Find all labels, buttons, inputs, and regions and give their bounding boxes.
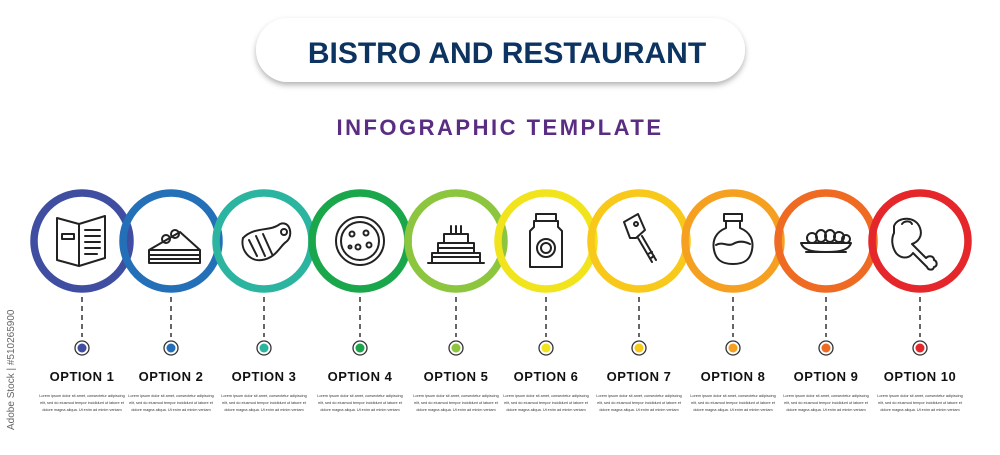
option labels: OPTION 3 bbox=[232, 369, 296, 384]
icon: chicken leg bbox=[892, 219, 937, 270]
option labels: OPTION 7 bbox=[607, 369, 671, 384]
option descriptions: dolore magna aliqua. Ut enim ad minim veniam bbox=[786, 408, 866, 412]
icon: dish bbox=[801, 230, 851, 252]
circle 10 bbox=[872, 193, 968, 289]
option descriptions: dolore magna aliqua. Ut enim ad minim veniam bbox=[506, 408, 586, 412]
option descriptions: elit, sed do eiusmod tempor incididunt ut labore et bbox=[129, 401, 214, 405]
option descriptions: dolore magna aliqua. Ut enim ad minim veniam bbox=[599, 408, 679, 412]
option labels: OPTION 2 bbox=[139, 369, 203, 384]
circle 9 bbox=[778, 193, 874, 289]
option labels: OPTION 6 bbox=[514, 369, 578, 384]
icon: wedding cake bbox=[428, 226, 484, 263]
icon: cake slice bbox=[149, 230, 200, 263]
option labels: OPTION 9 bbox=[794, 369, 858, 384]
option labels: OPTION 4 bbox=[328, 369, 393, 384]
option descriptions: dolore magna aliqua. Ut enim ad minim veniam bbox=[320, 408, 400, 412]
option descriptions: dolore magna aliqua. Ut enim ad minim veniam bbox=[693, 408, 773, 412]
option descriptions: Lorem ipsum dolor sit amet, consectetur adipiscing bbox=[128, 394, 214, 398]
option descriptions: Lorem ipsum dolor sit amet, consectetur adipiscing bbox=[317, 394, 403, 398]
circle 4 bbox=[312, 193, 408, 289]
circle 2 bbox=[123, 193, 219, 289]
option descriptions: Lorem ipsum dolor sit amet, consectetur adipiscing bbox=[39, 394, 125, 398]
icon: cleaver bbox=[624, 214, 656, 262]
option descriptions: elit, sed do eiusmod tempor incididunt ut labore et bbox=[318, 401, 403, 405]
option labels: OPTION 5 bbox=[424, 369, 488, 384]
option dots bbox=[75, 341, 927, 355]
option descriptions: dolore magna aliqua. Ut enim ad minim veniam bbox=[42, 408, 122, 412]
subtitle: INFOGRAPHIC TEMPLATE bbox=[336, 115, 664, 140]
option descriptions: dolore magna aliqua. Ut enim ad minim veniam bbox=[880, 408, 960, 412]
option descriptions: dolore magna aliqua. Ut enim ad minim veniam bbox=[224, 408, 304, 412]
option descriptions: elit, sed do eiusmod tempor incididunt ut labore et bbox=[222, 401, 307, 405]
option descriptions: elit, sed do eiusmod tempor incididunt ut labore et bbox=[40, 401, 125, 405]
title pill bbox=[256, 18, 745, 82]
circle 8 bbox=[685, 193, 781, 289]
option descriptions bbox=[39, 394, 963, 412]
icon: honey jar bbox=[714, 214, 752, 264]
circle 7 bbox=[591, 193, 687, 289]
option descriptions: dolore magna aliqua. Ut enim ad minim veniam bbox=[131, 408, 211, 412]
option descriptions: elit, sed do eiusmod tempor incididunt ut labore et bbox=[691, 401, 776, 405]
option descriptions: elit, sed do eiusmod tempor incididunt ut labore et bbox=[597, 401, 682, 405]
option descriptions: elit, sed do eiusmod tempor incididunt ut labore et bbox=[414, 401, 499, 405]
icon: pizza bbox=[336, 217, 384, 265]
option labels: OPTION 1 bbox=[50, 369, 114, 384]
option descriptions: elit, sed do eiusmod tempor incididunt ut labore et bbox=[784, 401, 869, 405]
option descriptions: Lorem ipsum dolor sit amet, consectetur adipiscing bbox=[690, 394, 776, 398]
circle 5 bbox=[408, 193, 504, 289]
circle 1 bbox=[34, 193, 130, 289]
option descriptions: elit, sed do eiusmod tempor incididunt ut labore et bbox=[504, 401, 589, 405]
option descriptions: dolore magna aliqua. Ut enim ad minim veniam bbox=[416, 408, 496, 412]
watermark id: Adobe Stock | #510265900 bbox=[6, 309, 17, 430]
option labels: OPTION 10 bbox=[884, 369, 956, 384]
circle 6 bbox=[498, 193, 594, 289]
option descriptions: elit, sed do eiusmod tempor incididunt ut labore et bbox=[878, 401, 963, 405]
option descriptions: Lorem ipsum dolor sit amet, consectetur adipiscing bbox=[221, 394, 307, 398]
option descriptions: Lorem ipsum dolor sit amet, consectetur adipiscing bbox=[877, 394, 963, 398]
option descriptions: Lorem ipsum dolor sit amet, consectetur adipiscing bbox=[413, 394, 499, 398]
option labels: OPTION 8 bbox=[701, 369, 765, 384]
title pill: BISTRO AND RESTAURANT bbox=[308, 37, 706, 70]
icon: jar bbox=[530, 214, 562, 267]
icon: menu bbox=[57, 216, 105, 266]
icon: steak bbox=[242, 223, 290, 260]
option labels bbox=[50, 369, 956, 384]
option descriptions: Lorem ipsum dolor sit amet, consectetur adipiscing bbox=[596, 394, 682, 398]
option descriptions: Lorem ipsum dolor sit amet, consectetur adipiscing bbox=[783, 394, 869, 398]
option descriptions: Lorem ipsum dolor sit amet, consectetur adipiscing bbox=[503, 394, 589, 398]
circle 3 bbox=[216, 193, 312, 289]
